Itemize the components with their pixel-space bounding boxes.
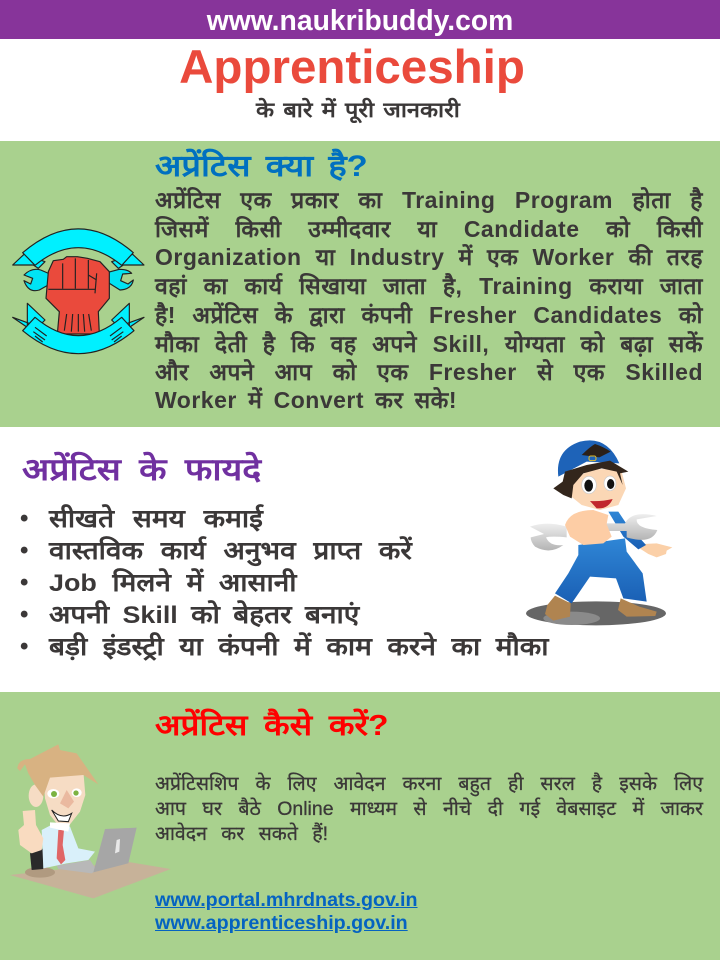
body paragraph: और अपने आप को एक Fresher से एक Skilled xyxy=(155,359,703,385)
body paragraph: Worker में Convert कर सके! xyxy=(155,387,457,413)
body paragraph: अप्रेंटिस एक प्रकार का Training Program होता है xyxy=(155,187,703,213)
heading: what is apprentice: अप्रेंटिस क्या है? xyxy=(155,150,368,183)
instructions paragraph: आवेदन कर सकते हैं! xyxy=(155,823,328,845)
benefit list xyxy=(20,504,550,661)
body paragraph: है! अप्रेंटिस के द्वारा कंपनी Fresher Candidates को xyxy=(155,302,703,328)
benefit list: • xyxy=(20,537,28,564)
illustration: mechanic boy with wrench xyxy=(526,440,672,626)
icon: fist and wrench emblem xyxy=(12,228,145,354)
benefit list: • xyxy=(20,601,28,628)
benefit list: • xyxy=(20,633,28,660)
heading: benefits: अप्रेंटिस के फायदे xyxy=(22,452,261,487)
header banner: www.naukribuddy.com xyxy=(207,4,513,36)
benefit list: Job मिलने में आसानी xyxy=(49,569,297,597)
instructions paragraph: आप घर बैठे Online माध्यम से नीचे दी गई वेबसाइट में जाकर xyxy=(155,798,703,820)
benefit list: • xyxy=(20,505,28,532)
benefit list: अपनी Skill को बेहतर बनाएं xyxy=(49,601,359,629)
body paragraph: जिसमें किसी उम्मीदवार या Candidate को किसी xyxy=(155,216,703,242)
website links xyxy=(155,889,418,934)
illustration: man with laptop xyxy=(10,744,170,898)
body paragraph xyxy=(154,187,704,413)
panel: how to apply xyxy=(0,692,720,960)
instructions paragraph xyxy=(155,772,704,845)
benefit list: सीखते समय कमाई xyxy=(49,505,263,533)
benefit list: • xyxy=(20,569,28,596)
website links: www.portal.mhrdnats.gov.in xyxy=(155,889,418,911)
body paragraph: मौका देती है कि वह अपने Skill, योग्यता को बढ़ा सकें xyxy=(155,331,703,357)
title: Apprenticeship xyxy=(179,41,525,94)
body paragraph: Organization या Industry में एक Worker की तरह xyxy=(155,244,703,270)
heading: how to apply: अप्रेंटिस कैसे करें? xyxy=(155,710,388,742)
panel: benefits xyxy=(0,427,720,692)
website links: www.apprenticeship.gov.in xyxy=(155,912,408,934)
header banner xyxy=(0,0,720,39)
subtitle: के बारे में पूरी जानकारी xyxy=(256,99,460,122)
body paragraph: वहां का कार्य सिखाया जाता है, Training कराया जाता xyxy=(155,273,703,299)
benefit list: वास्तविक कार्य अनुभव प्राप्त करें xyxy=(49,537,412,565)
instructions paragraph: अप्रेंटिसशिप के लिए आवेदन करना बहुत ही सरल है इसके लिए xyxy=(155,773,703,795)
panel: what is apprenticeship xyxy=(0,141,720,427)
benefit list: बड़ी इंडस्ट्री या कंपनी में काम करने का मौका xyxy=(49,633,549,661)
